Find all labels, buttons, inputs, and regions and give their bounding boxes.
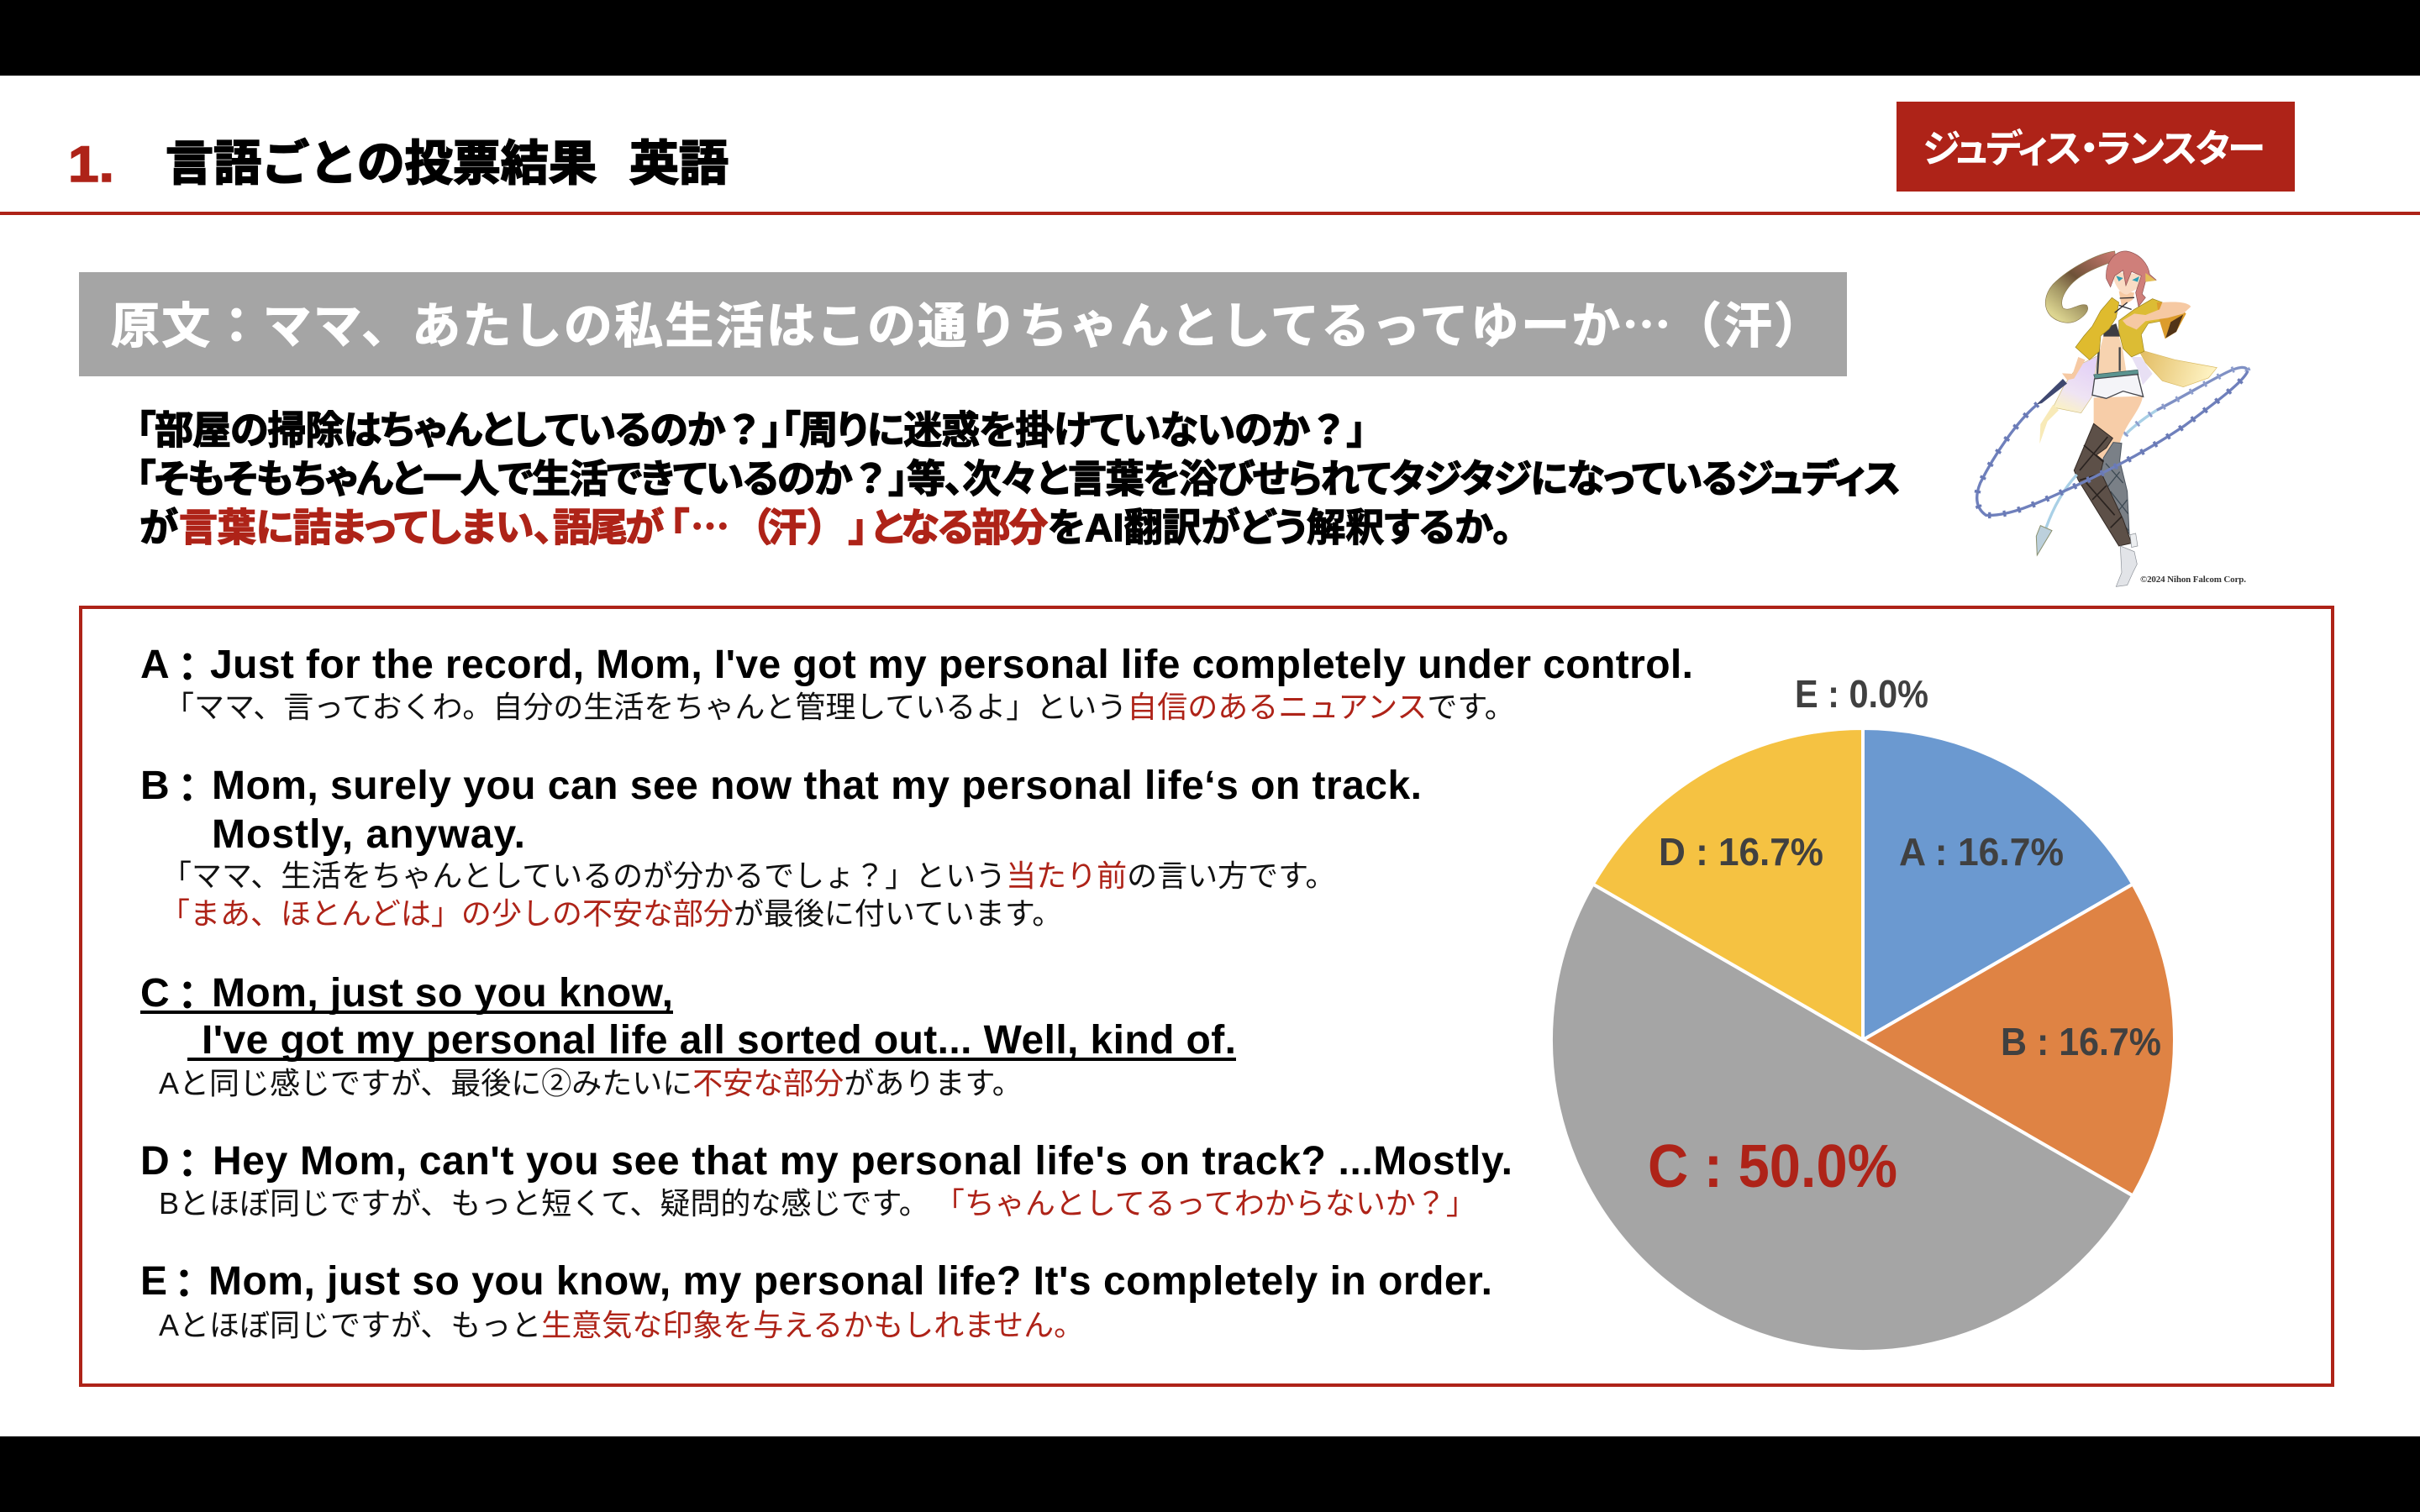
explanation paragraph: 汗 [768,497,807,553]
explanation paragraph: 「そもそもちゃんと一人で生活できているのか？」等、次々と言葉を浴びせられてタジタジになっているジュディス [136,449,1901,504]
option C: C [140,971,170,1016]
original text banner: 原文：ママ、あたしの私生活はこの通りちゃんとしてるってゆーか…（汗） [111,286,1824,357]
rear stocking [2101,443,2129,534]
ponytail [2045,251,2116,323]
sleeve [2157,302,2186,339]
pie labels: B : 16.7% [2001,1020,2161,1063]
midriff [2097,336,2127,375]
slice B [1863,884,2175,1196]
option B: 「まあ、ほとんどは」の少しの不安な部分が最後に付いています。 [160,896,1062,931]
boots [2116,546,2137,586]
hair [2106,251,2156,307]
option D: Hey Mom, can't you see that my personal life's on track? ...Mostly. [213,1139,1512,1184]
whip front [1977,371,2248,515]
explanation paragraph [136,400,1901,553]
left arm [2062,357,2086,380]
option D [140,1131,1512,1221]
pie labels: E : 0.0% [1795,672,1928,716]
option A: ： [167,634,208,693]
pie chart [1551,728,2175,1352]
option C [140,963,1236,1100]
coat right [2137,347,2217,387]
top black bar [0,0,2420,76]
option D: Bとほぼ同じですが、もっと短くて、疑問的な感じです。 「ちゃんとしてるってわからないか？」 [159,1186,1476,1221]
title: 言語ごとの投票結果 [166,125,597,194]
hair tips [2145,273,2156,282]
explanation paragraph: となる部分 [871,506,1048,549]
icon: character illustration [1977,251,2248,586]
explanation paragraph: 「 [670,506,689,549]
option B: ： [167,755,208,814]
pie labels: A : 16.7% [1899,830,2064,874]
choker [2115,297,2134,312]
header rule [0,212,2420,215]
option B: B [140,764,170,808]
pie labels: D : 16.7% [1659,830,1823,874]
thigh [2094,396,2143,459]
option D: ： [167,1131,208,1189]
whip handle [2036,379,2067,405]
option C: Aと同じ感じですが、最後に②みたいに不安な部分があります。 [159,1066,1023,1100]
option C: Mom, just so you know, [212,971,673,1016]
option B: 「ママ、生活をちゃんとしているのが分かるでしょ？」という当たり前の言い方です。 [161,858,1336,893]
option E [140,1251,1492,1342]
spear tip [2036,526,2052,555]
eyes [2116,276,2139,282]
option C: I've got my personal life all sorted out... Well, kind of. [202,1018,1236,1063]
option A [140,634,1693,724]
explanation paragraph: が [139,506,178,549]
title: 英語 [629,125,729,194]
whip barbs [1977,371,2248,515]
character name badge: ジュディス・ランスター [1923,118,2265,174]
option A: 「ママ、言っておくわ。自分の生活をちゃんと管理しているよ」という自信のあるニュアンスです。 [164,690,1515,724]
explanation paragraph: をAI翻訳がどう解釈するか。 [1048,506,1512,549]
explanation paragraph: … [691,497,729,553]
shorts [2092,375,2144,398]
bottom black bar [0,1436,2420,1512]
option B [140,755,1422,931]
title [68,125,729,194]
coat back left [2053,355,2098,413]
option A: Just for the record, Mom, I've got my personal life completely under control. [210,643,1693,687]
option E: Mom, just so you know, my personal life? It's completely in order. [208,1259,1492,1304]
pie labels: C : 50.0% [1648,1133,1897,1200]
slice A [1863,728,2133,1040]
copyright: ©2024 Nihon Falcom Corp. [2140,575,2246,585]
option B: Mom, surely you can see now that my personal life‘s on track. [212,764,1422,808]
explanation paragraph: 」 [849,506,868,549]
coat inner right [2132,357,2153,385]
top [2103,323,2120,337]
option E: E [140,1259,167,1304]
slice C [1551,884,2133,1352]
jacket right [2119,299,2164,357]
option D: D [140,1139,170,1184]
jacket left [2075,297,2119,360]
explanation paragraph: 語尾が [553,506,664,549]
option B: Mostly, anyway. [212,812,525,857]
title: 1. [68,136,114,192]
panel: translation options [81,607,2333,1385]
coat tail [2039,405,2059,444]
explanation paragraph: ） [807,497,845,553]
forearm and hand [2123,302,2191,329]
pie labels [1648,672,2161,1200]
option E: ： [164,1251,204,1310]
face [2112,271,2142,295]
rear whip [2157,367,2248,410]
belt [2094,370,2139,379]
neck [2119,291,2134,307]
lower whip tail [2046,475,2077,528]
option E: Aとほぼ同じですが、もっと生意気な印象を与えるかもしれません。 [159,1308,1084,1342]
explanation paragraph: 言葉に詰まってしまい、 [179,506,553,549]
explanation paragraph: 「部屋の掃除はちゃんとしているのか？」「周りに迷惑を掛けていないのか？」 [136,400,1366,455]
suspenders [2097,338,2120,374]
character name badge [1897,102,2295,192]
slice D [1593,728,1863,1040]
option C: ： [167,963,208,1021]
option A: A [140,643,170,687]
explanation paragraph: （ [734,497,772,553]
front stocking [2074,423,2132,546]
original text banner [79,272,1847,376]
